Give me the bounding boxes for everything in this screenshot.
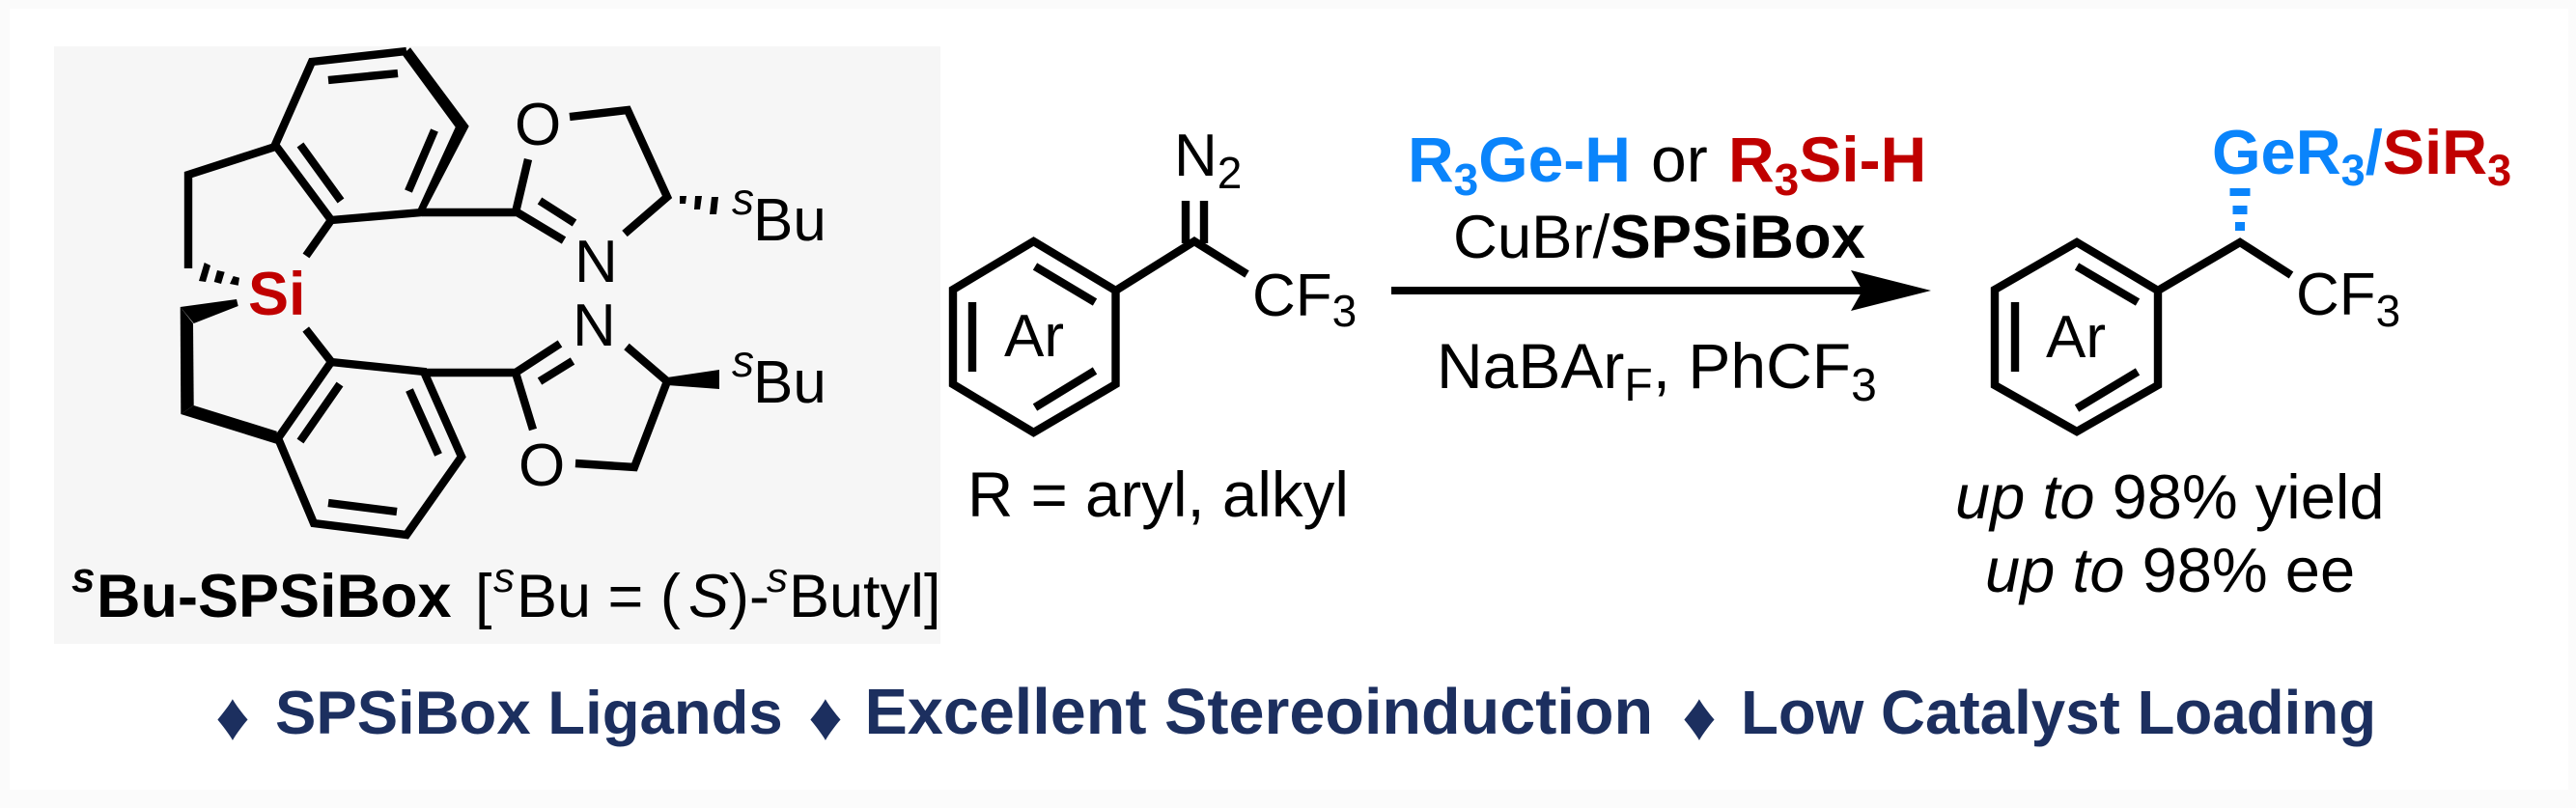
upper oxazoline: s	[732, 174, 754, 224]
ligand caption: s	[71, 554, 95, 601]
diazo carbon bonds	[1116, 201, 1247, 291]
yield and ee results	[1955, 461, 2384, 605]
silane and germane reagents: R	[1728, 124, 1775, 195]
N2 label: N	[1174, 123, 1218, 189]
silane and germane reagents: 3	[1775, 154, 1799, 205]
ligand caption: Butyl]	[789, 563, 941, 630]
ligand caption: s	[767, 554, 788, 601]
lower oxazoline	[424, 293, 826, 499]
silane and germane reagents: 3	[1454, 154, 1478, 205]
additive and solvent: NaBAr	[1437, 330, 1624, 402]
highlight 1: SPSiBox Ligands	[275, 680, 783, 747]
ligand caption: Bu = (	[517, 563, 681, 630]
upper oxazoline: N	[574, 229, 618, 295]
CF3 label: 3	[2376, 286, 2400, 336]
lower oxazoline: N	[573, 293, 616, 359]
upper oxazoline	[422, 92, 826, 295]
lower oxazoline: Bu	[753, 349, 826, 416]
lower oxazoline: O	[518, 432, 565, 499]
highlight 3: Low Catalyst Loading	[1741, 679, 2376, 747]
ligand caption: s	[493, 554, 515, 601]
N2 label: 2	[1218, 148, 1242, 198]
additive and solvent: F	[1624, 360, 1653, 411]
reaction arrow	[1391, 270, 1931, 311]
upper benzene ring	[275, 47, 469, 220]
aryl ring: Ar	[2046, 304, 2106, 371]
hashed bond	[2230, 188, 2250, 231]
CF3 label: 3	[1332, 286, 1357, 336]
lower benzene ring	[278, 362, 462, 535]
silane and germane reagents: Ge-H	[1478, 124, 1631, 195]
ligand caption	[71, 554, 941, 630]
upper oxazoline: O	[515, 92, 561, 158]
highlight 2: ♦	[808, 679, 843, 754]
highlight 2: Excellent Stereoinduction	[865, 677, 1653, 748]
silane and germane reagents	[1408, 124, 1926, 205]
lower oxazoline: s	[732, 336, 754, 386]
GeR3 / SiR3 label: /	[2366, 117, 2383, 187]
catalyst: CuBr/SPSiBox	[1453, 204, 1865, 271]
upper oxazoline: Bu	[753, 187, 826, 254]
ligand caption: S	[688, 563, 729, 630]
yield and ee results: up to 98% ee	[1985, 535, 2355, 605]
lower five-membered ring bonds	[181, 299, 331, 444]
yield and ee results: up to 98% yield	[1955, 461, 2384, 532]
GeR3 / SiR3 label: SiR	[2383, 117, 2487, 187]
panel: sBu-SPSiBox ligand	[54, 46, 941, 644]
silicon atom label: Si	[248, 261, 306, 328]
substrate: aryl trifluoromethyl diazo compound	[953, 123, 1357, 530]
aryl ring	[953, 241, 1116, 432]
GeR3 / SiR3 label: 3	[2487, 146, 2511, 195]
reaction conditions and arrow	[1391, 124, 1931, 411]
highlights line	[215, 677, 2376, 754]
panel background	[54, 46, 940, 644]
R group definition: R = aryl, alkyl	[967, 460, 1349, 530]
silane and germane reagents: or	[1651, 124, 1708, 195]
GeR3 / SiR3 label: 3	[2341, 146, 2366, 195]
highlight 3: ♦	[1682, 679, 1717, 754]
ligand caption: [	[475, 563, 492, 630]
silane and germane reagents: R	[1408, 124, 1454, 195]
ligand caption: Bu-SPSiBox	[97, 563, 452, 630]
GeR3 / SiR3 label: GeR	[2212, 117, 2341, 187]
CF3 label: CF	[1252, 263, 1332, 329]
ligand structure: spiro silicon bisoxazoline	[181, 47, 826, 535]
upper five-membered ring bonds	[188, 147, 331, 286]
additive and solvent: 3	[1851, 360, 1877, 411]
ligand caption: )-	[729, 563, 770, 630]
highlight 1: ♦	[215, 679, 250, 754]
aryl ring	[1995, 242, 2158, 432]
additive and solvent: , PhCF	[1653, 330, 1851, 402]
product: chiral organogermane / organosilane	[1955, 117, 2511, 605]
aryl ring: Ar	[1004, 303, 1064, 370]
silane and germane reagents: Si-H	[1799, 124, 1926, 195]
stereocentre bonds	[2158, 242, 2291, 291]
CF3 label: CF	[2296, 262, 2376, 328]
